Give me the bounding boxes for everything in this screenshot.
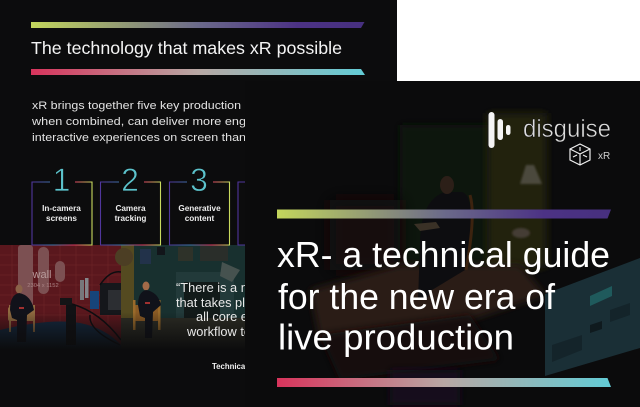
slippers — [512, 228, 530, 238]
quote text: “There is a new — [176, 280, 265, 295]
label 1: In-camera — [42, 204, 81, 213]
photo: red LED volume stage — [0, 245, 121, 350]
cover top gradient bar — [277, 210, 611, 218]
feature box 3: content — [185, 214, 215, 223]
cover title: for the new era of — [278, 276, 556, 317]
number 1: 1 — [53, 162, 70, 198]
lower gradient bar — [31, 69, 365, 75]
feature box 2 — [100, 162, 160, 245]
body text — [31, 100, 246, 144]
lamp — [520, 165, 542, 184]
icon: xR cube — [570, 144, 590, 165]
white page corner — [397, 0, 640, 81]
quote text — [176, 282, 245, 336]
feature box 4 clipped — [238, 182, 245, 245]
feature box 3 — [170, 162, 230, 245]
cover title: xR- a technical guide — [277, 234, 610, 275]
number 3: 3 — [190, 162, 208, 198]
label 2: Camera — [115, 204, 146, 213]
quote text: workflow to — [186, 324, 251, 339]
logo mark — [488, 112, 510, 148]
logo: disguise — [488, 112, 611, 165]
top gradient bar — [31, 22, 364, 28]
presenter silhouette — [414, 176, 472, 300]
feature box 1 — [32, 162, 92, 245]
footer label: Technical — [212, 362, 247, 371]
seated presenter — [8, 284, 35, 342]
quote text: that takes place — [176, 295, 266, 310]
heading: back page: The technology that makes xR possible — [31, 38, 342, 58]
panel: front cover — [277, 112, 640, 405]
logo wordmark: disguise — [523, 115, 611, 143]
feature box 1: screens — [46, 214, 77, 223]
xR label: xR — [598, 151, 610, 162]
camera rig — [60, 272, 121, 345]
cover bottom gradient bar — [277, 378, 611, 387]
photo: red LED volume stage: 2304 x 1152 — [27, 283, 59, 289]
led wall label: wall — [32, 269, 51, 281]
cover title — [277, 234, 610, 358]
monitor — [545, 258, 640, 376]
body text: when combined, can deliver more eng — [31, 116, 246, 128]
body text: xR brings together five key production — [32, 100, 241, 112]
photo fade to page colour — [0, 312, 245, 350]
cover background photo — [310, 113, 640, 405]
panel: back page — [0, 22, 365, 369]
body text: interactive experiences on screen than — [32, 132, 246, 144]
photo: virtual parlour set — [115, 245, 245, 350]
seated presenter in parlour — [133, 282, 161, 338]
quote text: all core elements — [196, 309, 293, 324]
label 3: Generative — [178, 204, 221, 213]
feature box 2: tracking — [115, 214, 146, 223]
cover title: live production — [278, 316, 514, 358]
number 2: 2 — [121, 162, 139, 198]
